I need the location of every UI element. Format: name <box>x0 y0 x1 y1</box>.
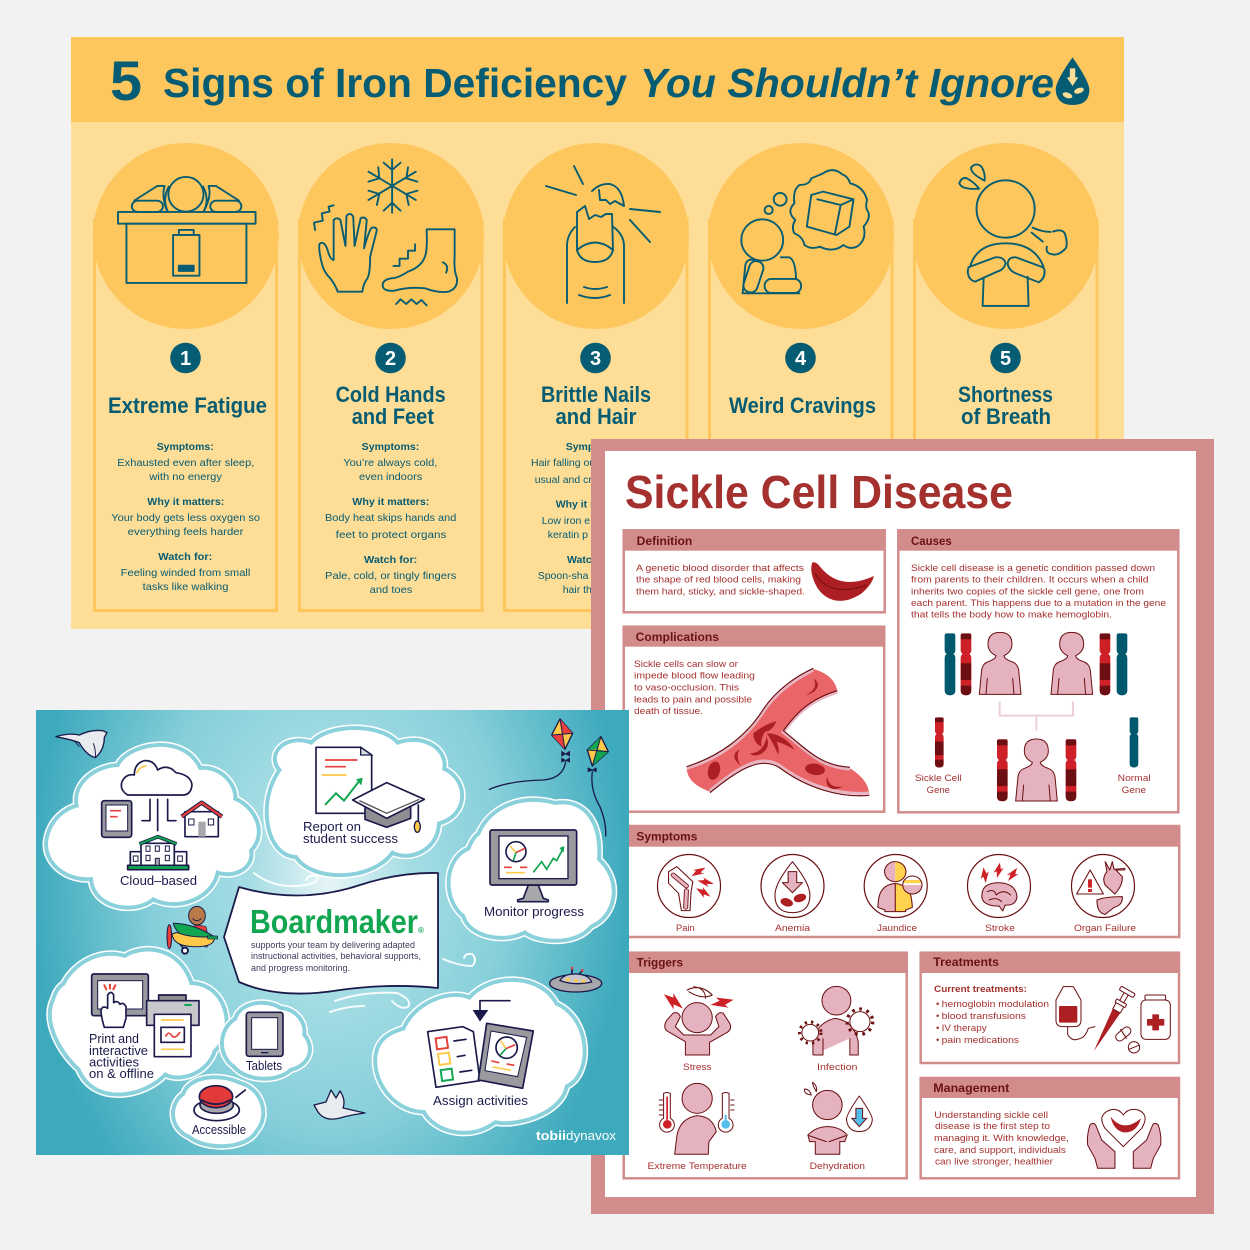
card text: You’re always cold, <box>343 457 437 469</box>
trigger: stress <box>660 987 736 1072</box>
panel: symptoms: Symptoms <box>636 832 697 844</box>
definition text: A genetic blood disorder that affects <box>636 563 804 574</box>
panel: causes: Causes <box>911 536 952 548</box>
card text: Body heat skips hands and <box>325 512 456 524</box>
title: Weird Cravings <box>729 393 876 418</box>
banner: Boardmaker <box>224 873 438 994</box>
management text: can live stronger, healthier <box>935 1156 1053 1168</box>
icon: bird <box>314 1090 365 1119</box>
card 4: weird cravings <box>708 143 894 610</box>
illustration: blood vessel with sickled cells <box>687 668 869 796</box>
treatments list: blood transfusions <box>942 1011 1026 1022</box>
symptom: organ failure: Organ Failure <box>1074 923 1136 933</box>
label <box>89 1032 154 1081</box>
panel: complications <box>623 626 885 812</box>
definition text <box>636 563 805 598</box>
symptom: jaundice: Jaundice <box>877 923 917 933</box>
card text (partly covered): Low iron e <box>542 515 590 527</box>
card text (partly covered): usual and cracking <box>535 474 622 486</box>
card text: with no energy <box>148 471 223 483</box>
icon: person thinking of ice cube <box>741 170 869 294</box>
title <box>958 382 1053 429</box>
panel: management: Management <box>933 1083 1009 1095</box>
label: Tablets <box>246 1059 282 1073</box>
card 3: brittle nails and hair <box>503 143 689 610</box>
title: of Breath <box>961 404 1051 429</box>
cloud: assign activities <box>377 982 583 1131</box>
number badge 3 <box>580 343 611 373</box>
card text (partly covered) <box>531 441 632 596</box>
treatments list: Current treatments: <box>934 984 1027 995</box>
management text: managing it. With knowledge, <box>934 1133 1069 1144</box>
label: Print and <box>89 1032 139 1046</box>
icon: boy in airplane <box>167 906 218 954</box>
treatments list <box>934 984 1049 1046</box>
causes text: each parent. This happens due to a mutation in the gene <box>911 598 1166 609</box>
card text (partly covered): Symptoms: <box>566 441 623 453</box>
complications text <box>634 659 755 717</box>
symptom: organ failure <box>1072 854 1136 933</box>
card 1: extreme fatigue <box>93 143 279 610</box>
card text (partly covered): Why it matters: <box>556 499 632 511</box>
treatments list: pain medications <box>942 1035 1019 1046</box>
card text: Symptoms: <box>157 441 214 453</box>
icon: worksheet and tablet <box>428 1001 533 1088</box>
header band: Signs of Iron Deficiency <box>163 60 627 106</box>
card text (partly covered): Hair falling out <box>531 457 598 469</box>
poster: Boardmaker <box>36 710 629 1155</box>
trigger: dehydration: Dehydration <box>810 1161 865 1171</box>
number badge 4 <box>785 343 816 373</box>
panel: triggers: Triggers <box>637 957 683 969</box>
complications text: Sickle cells can slow or <box>634 659 738 670</box>
decorative air swirls <box>254 873 475 1012</box>
management text: care, and support, individuals <box>934 1145 1066 1156</box>
number badge 2 <box>375 343 406 373</box>
label: student success <box>303 832 398 846</box>
icon: red switch button <box>194 1086 245 1121</box>
card text (partly covered): Watch for: <box>567 554 619 566</box>
trigger: infection <box>800 986 873 1072</box>
icon: box with low battery <box>118 177 256 283</box>
card text: even indoors <box>359 471 422 483</box>
management text: disease is the first step to <box>935 1121 1050 1132</box>
icon: kites <box>489 719 608 836</box>
trigger: extreme temperature: Extreme Temperature <box>648 1161 747 1171</box>
icon: seagull <box>56 730 107 758</box>
complications text: leads to pain and possible <box>634 694 752 706</box>
title: Cold Hands <box>336 382 446 407</box>
logo: tobii dynavox: dynavox <box>566 1128 617 1143</box>
card text: Your body gets less oxygen so <box>111 512 260 524</box>
icon: broken nail <box>546 166 660 303</box>
trigger: infection: Infection <box>817 1062 858 1072</box>
card text: Why it matters: <box>352 496 429 508</box>
description: instructional activities, behavioral supports, <box>251 951 421 961</box>
description: supports your team by delivering adapted <box>251 940 415 950</box>
symptom: anemia <box>761 854 824 933</box>
gene labels: Gene <box>1122 785 1146 795</box>
treatments list: • <box>936 1035 939 1046</box>
symptom: pain: Pain <box>676 923 695 933</box>
gene labels <box>915 773 1151 795</box>
label: Cloud–based <box>120 874 197 888</box>
icon: person short of breath <box>959 164 1067 306</box>
cloud: cloud-based <box>48 747 257 906</box>
symptom: pain <box>658 854 720 933</box>
logo: Boardmaker <box>250 903 418 940</box>
card text: Why it matters: <box>147 496 224 508</box>
trigger: extreme temperature <box>648 1083 747 1171</box>
management text <box>934 1110 1069 1168</box>
card text: Symptoms: <box>362 441 419 453</box>
header band: You Shouldn’t Ignore <box>640 60 1054 106</box>
panel: definition: Definition <box>637 536 692 548</box>
title <box>336 382 446 429</box>
card text: everything feels harder <box>128 526 244 538</box>
trigger: dehydration <box>804 1082 872 1171</box>
causes text: that tells the body how to make hemoglobin. <box>911 610 1112 620</box>
title: Shortness <box>958 382 1053 407</box>
label: activities <box>89 1056 139 1070</box>
cloud: print and interactive activities <box>52 951 225 1093</box>
management text: Understanding sickle cell <box>934 1110 1048 1121</box>
panel: complications: Complications <box>636 632 719 644</box>
title: and Hair <box>556 404 637 429</box>
number badge 2: 2 <box>385 348 396 370</box>
icon: flying saucer <box>550 967 602 992</box>
title: Brittle Nails <box>541 382 651 407</box>
treatments list: hemoglobin modulation <box>942 999 1049 1010</box>
panel: definition <box>623 529 886 612</box>
causes text: from parents to their children. It occurs when a child <box>911 574 1148 586</box>
card text (partly covered): Spoon-sha <box>538 570 589 582</box>
label: Monitor progress <box>484 905 584 919</box>
icon: hands holding heart <box>1087 1109 1161 1168</box>
panel: triggers <box>623 952 908 1178</box>
icon: report and graduation cap <box>316 747 424 832</box>
panel: symptoms <box>623 825 1180 937</box>
poster: sickle cell disease <box>591 439 1214 1214</box>
symptom: anemia: Anemia <box>775 923 810 933</box>
header band <box>71 37 1124 122</box>
card text: Feeling winded from small <box>121 567 250 579</box>
card text: Watch for: <box>158 551 212 563</box>
causes text <box>911 563 1166 620</box>
label <box>303 820 398 846</box>
definition text: them hard, sticky, and sickle-shaped. <box>636 586 805 598</box>
icon: cloud network <box>102 761 222 870</box>
icon: monitor with chart <box>490 830 577 902</box>
cloud: monitor progress <box>451 802 612 939</box>
complications text: impede blood flow leading <box>634 670 755 682</box>
card 5: shortness of breath <box>913 143 1099 610</box>
treatments list: • <box>936 999 939 1010</box>
description: and progress monitoring. <box>251 963 350 973</box>
diagram: inheritance <box>935 632 1138 801</box>
panel: management <box>920 1077 1180 1178</box>
title: Sickle Cell Disease <box>625 466 1013 518</box>
card text: Watch for: <box>364 554 417 566</box>
header band: 5 <box>110 49 142 112</box>
icon: iron droplet <box>1056 57 1089 105</box>
poster: 5 signs of iron deficiency <box>71 37 1124 629</box>
complications text: death of tissue. <box>634 706 703 717</box>
symptom: jaundice <box>864 854 927 933</box>
icon: touch screen and printer <box>92 974 199 1057</box>
title: Extreme Fatigue <box>108 393 267 418</box>
card text: Pale, cold, or tingly fingers <box>325 570 456 582</box>
cloud: report on student success <box>269 730 460 873</box>
icon: snowflake, hand and foot <box>314 159 457 305</box>
number badge 5 <box>990 343 1021 373</box>
number badge 1 <box>170 343 201 373</box>
icon: sickle cell <box>811 562 874 601</box>
gene labels: Sickle Cell <box>915 773 962 783</box>
cloud: tablets <box>224 1005 308 1077</box>
panel: treatments: Treatments <box>933 957 999 969</box>
card text (partly covered): hair th <box>563 584 592 596</box>
label: interactive <box>89 1044 148 1058</box>
number badge 3: 3 <box>590 348 601 370</box>
gene labels: Gene <box>927 785 950 795</box>
icon: tablet <box>246 1012 283 1056</box>
treatments list: • <box>936 1011 939 1022</box>
label: Assign activities <box>433 1094 528 1108</box>
label: Accessible <box>192 1123 246 1137</box>
treatments list: • <box>936 1023 939 1034</box>
card text (partly covered): keratin p <box>548 529 588 541</box>
logo: tobii dynavox: tobii <box>536 1128 566 1143</box>
card text: feet to protect organs <box>336 529 446 541</box>
label: on & offline <box>89 1067 154 1081</box>
logo: ® <box>418 926 424 935</box>
card text <box>325 441 456 596</box>
icons: IV bag, syringe, pills, bottle <box>1056 986 1170 1055</box>
title <box>541 382 651 429</box>
complications text: to vaso-occlusion. This <box>634 682 739 694</box>
number badge 1: 1 <box>180 348 191 370</box>
number badge 5: 5 <box>1000 348 1011 370</box>
panel: causes <box>897 529 1179 812</box>
logo: tobii dynavox <box>536 1128 617 1143</box>
symptom: stroke: Stroke <box>985 923 1015 933</box>
trigger: stress: Stress <box>683 1062 712 1072</box>
gene labels: Normal <box>1118 773 1151 783</box>
card text: and toes <box>370 584 412 596</box>
card text <box>111 441 260 593</box>
description <box>251 940 421 973</box>
card text: tasks like walking <box>143 581 229 593</box>
card 2: cold hands and feet <box>298 143 484 610</box>
panel: treatments <box>920 952 1180 1063</box>
symptom: stroke <box>968 854 1030 933</box>
label: Report on <box>303 820 361 834</box>
definition text: the shape of red blood cells, making <box>636 574 801 586</box>
causes text: inherits two copies of the sickle cell gene, one from <box>911 586 1144 598</box>
causes text: Sickle cell disease is a genetic condition passed down <box>911 563 1155 574</box>
card text: Exhausted even after sleep, <box>117 457 254 469</box>
number badge 4: 4 <box>795 348 807 370</box>
cloud: accessible <box>175 1079 261 1144</box>
treatments list: IV therapy <box>942 1023 987 1034</box>
title: and Feet <box>352 404 435 429</box>
